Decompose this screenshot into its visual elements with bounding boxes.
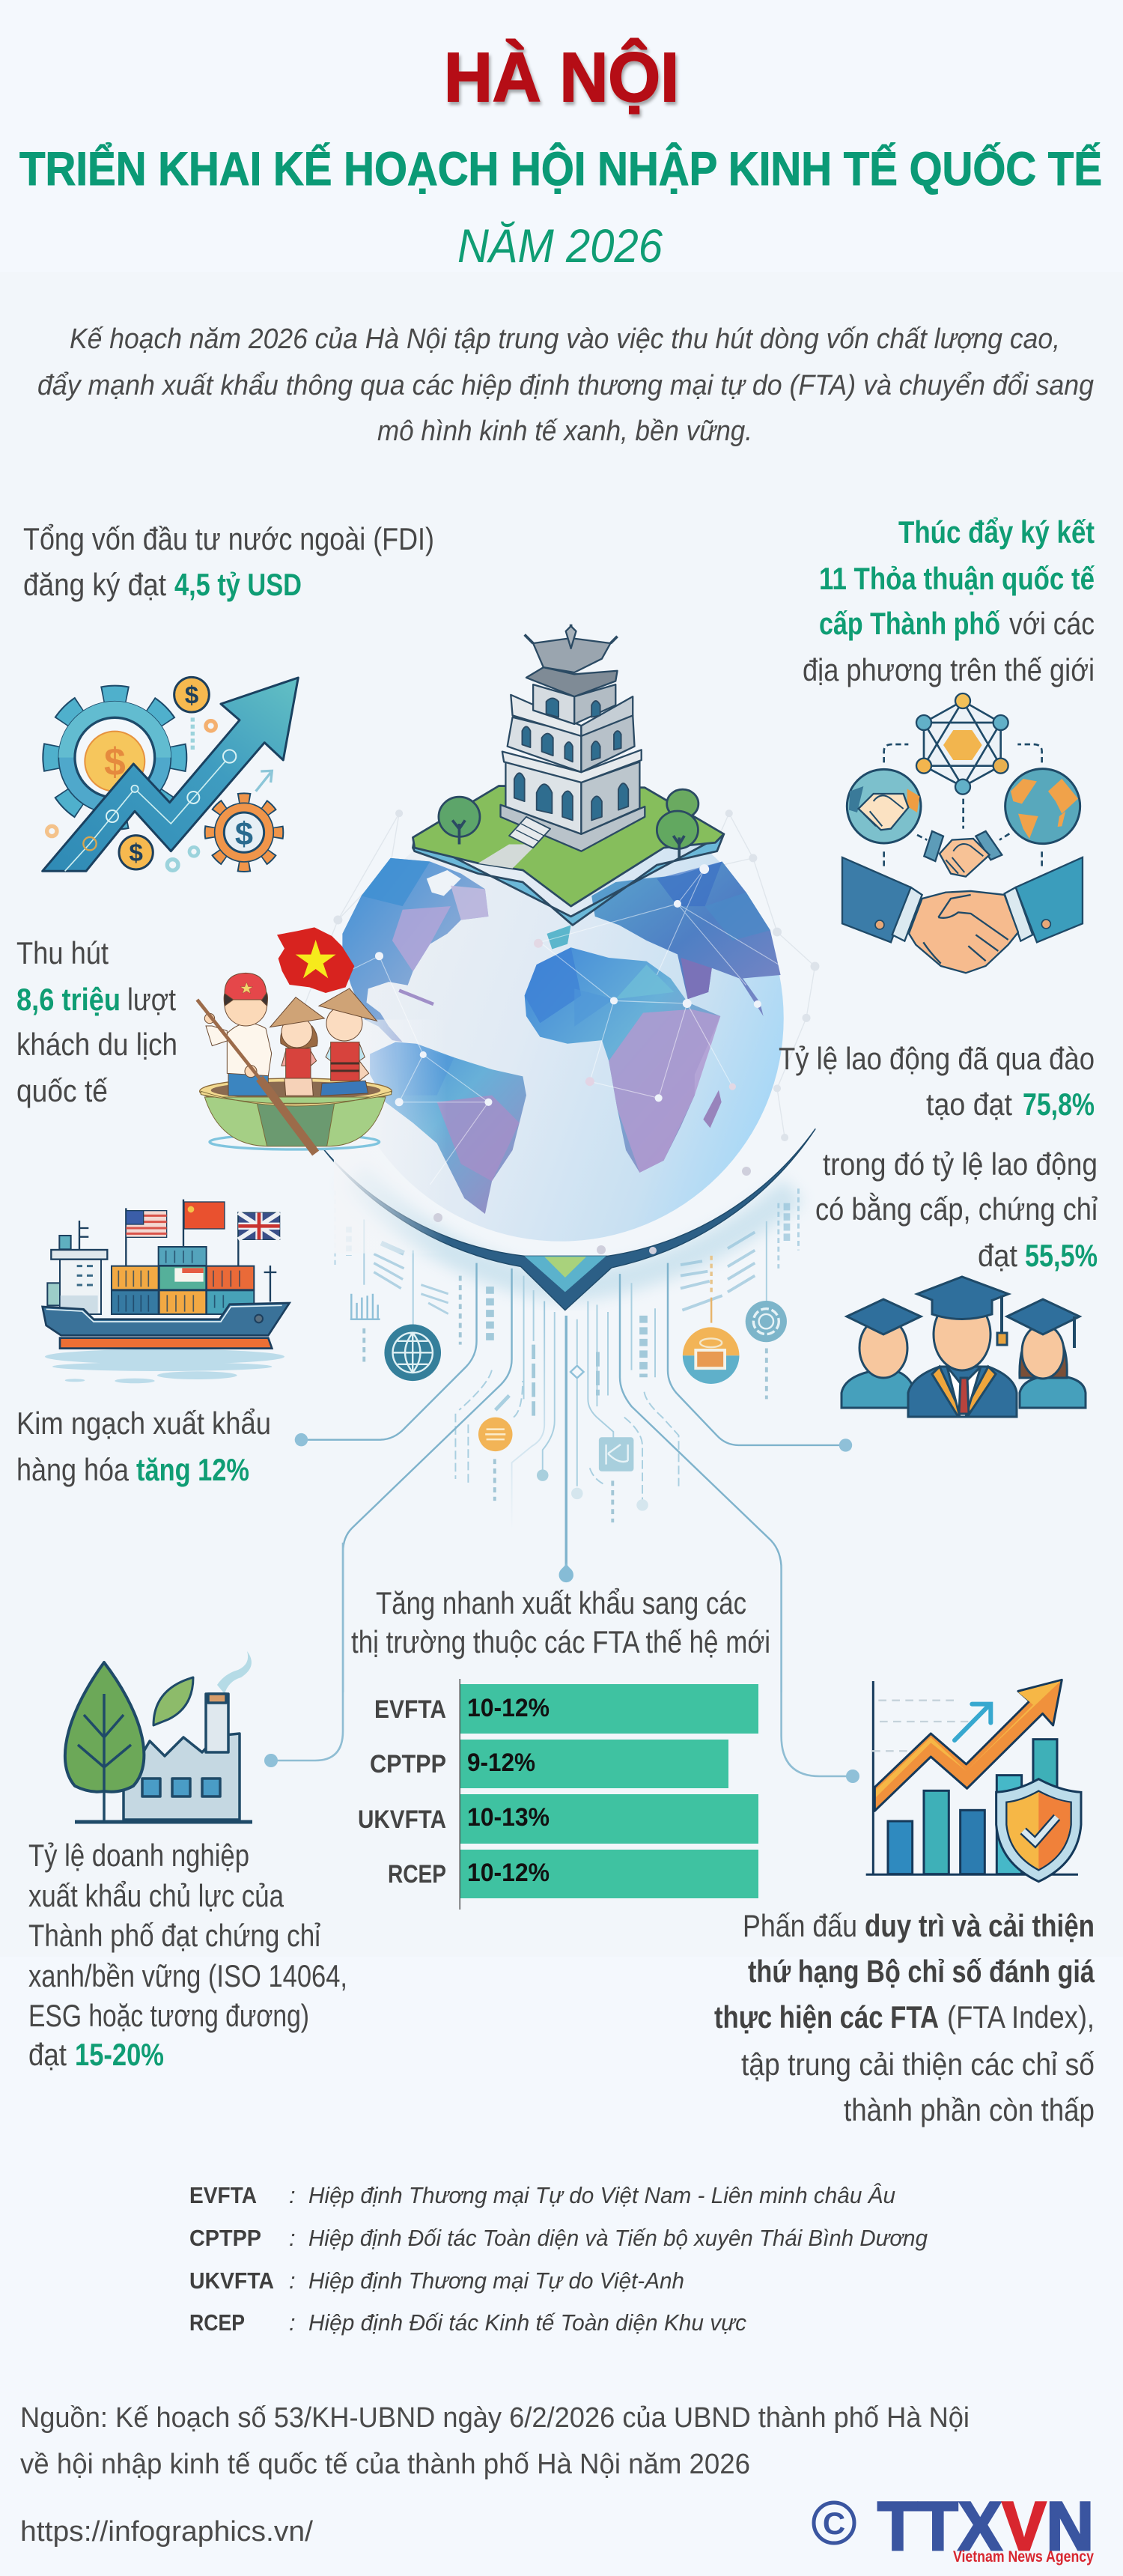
text: export turnover: tăng 12% <box>136 1452 249 1487</box>
blue arrow <box>955 1704 990 1740</box>
main traces <box>301 1263 845 1692</box>
large gear <box>53 696 177 819</box>
shield <box>996 1779 1081 1882</box>
legend: abbreviations <box>189 2182 928 2336</box>
small handshake <box>924 831 1002 877</box>
lower globe mesh nodes <box>433 1167 751 1254</box>
ground <box>75 1820 252 1824</box>
legend: abbreviations: Hiệp định Thương mại Tự do Việt-Anh <box>308 2267 684 2294</box>
tower <box>501 625 645 851</box>
large handshake <box>842 857 1083 973</box>
text: tourists: 8,6 triệu <box>16 982 121 1017</box>
illustration: graduates <box>842 1277 1086 1417</box>
agency name: Vietnam News Agency <box>953 2548 1094 2566</box>
text: tourists: Thu hút <box>16 935 109 970</box>
bars <box>888 1740 1057 1874</box>
bar: UKVFTA: 10-13% <box>467 1803 550 1832</box>
coracle hull <box>201 1091 392 1146</box>
text: bar chart heading: thị trường thuộc các FTA thế hệ mới <box>351 1624 770 1659</box>
bridge <box>47 1236 107 1314</box>
South America <box>370 1042 526 1214</box>
icon: gears and rising arrow <box>43 677 298 871</box>
text: FDI: 4,5 tỷ USD <box>174 567 302 602</box>
Vietnam flag <box>277 927 354 993</box>
text: green certification: ESG hoặc tương đương) <box>28 1998 309 2033</box>
orange gear <box>212 800 276 865</box>
year heading: NĂM 2026 <box>457 220 663 273</box>
text: export turnover: hàng hóa <box>16 1452 130 1487</box>
text: FDI <box>23 521 434 602</box>
text: FTA Index: Phấn đấu <box>743 1908 857 1943</box>
illustration: Turtle Tower on island <box>413 625 724 925</box>
coin bottom: $ <box>129 839 143 867</box>
paddle <box>197 1000 260 1078</box>
legend: abbreviations: EVFTA <box>189 2182 257 2208</box>
bar: UKVFTA: UKVFTA <box>358 1805 446 1834</box>
tower windows <box>514 698 628 820</box>
illustration: container ship <box>43 1200 290 1383</box>
hull <box>43 1303 290 1349</box>
legend: abbreviations: RCEP <box>189 2309 245 2336</box>
UK flag <box>238 1212 280 1239</box>
faint data slats <box>335 1188 798 1313</box>
text: FTA Index: (FTA Index), <box>947 1999 1095 2035</box>
bar: EVFTA: 10-12% <box>467 1694 550 1722</box>
minor traces <box>364 1219 767 1530</box>
bar: RCEP: 10-12% <box>467 1859 550 1887</box>
text: green certification: xuất khẩu chủ lực của <box>28 1878 284 1913</box>
text: export turnover <box>16 1406 271 1487</box>
website link: https://infographics.vn/ <box>20 2516 313 2548</box>
Caribbean <box>399 991 433 1004</box>
text: FDI: Tổng vốn đầu tư nước ngoài (FDI) <box>23 521 434 556</box>
connector drop: centre <box>559 1561 573 1582</box>
smoke <box>217 1651 252 1694</box>
factory <box>124 1694 240 1820</box>
text: green certification: đạt <box>28 2037 67 2072</box>
copyright mark <box>814 2503 854 2543</box>
bar: CPTPP: 9-12% <box>467 1749 535 1777</box>
text: green certification: xanh/bền vững (ISO 14064, <box>28 1958 347 1993</box>
text: international agreements <box>803 514 1095 687</box>
legend: abbreviations: Hiệp định Đối tác Kinh tế Toàn diện Khu vực <box>308 2309 746 2336</box>
icon: square chip <box>599 1437 633 1471</box>
connector dot: factory <box>264 1754 278 1767</box>
text: tourists: lượt <box>127 982 176 1017</box>
text: FTA Index: thực hiện các FTA <box>714 1999 939 2035</box>
text: green certification: Thành phố đạt chứng chỉ <box>28 1918 321 1953</box>
Eurasia <box>591 861 781 1016</box>
legend: abbreviations: UKVFTA <box>189 2267 274 2294</box>
text: tourists: quốc tế <box>16 1073 108 1108</box>
text: international agreements: cấp Thành phố <box>819 606 1000 641</box>
orange gear: $ <box>235 816 253 852</box>
US flag <box>126 1211 167 1237</box>
bar: UKVFTA <box>358 1794 758 1844</box>
text: export turnover: Kim ngạch xuất khẩu <box>16 1406 271 1441</box>
title: Hà Nội: HÀ NỘI <box>444 38 679 116</box>
collar shadow <box>352 1176 794 1288</box>
illustration: tree and factory <box>65 1651 252 1822</box>
trees right <box>657 789 699 858</box>
illustration: coracle boat with tourists <box>197 927 392 1153</box>
connector dot: right <box>839 1439 852 1452</box>
logo: TTXVN <box>814 2488 1094 2566</box>
bar: CPTPP <box>370 1740 728 1788</box>
island <box>413 786 724 925</box>
orange arrow <box>874 1680 1062 1811</box>
legend: abbreviations: : <box>289 2225 296 2251</box>
network mesh <box>334 869 779 1185</box>
left graduate <box>842 1299 921 1408</box>
icon: orange coin <box>478 1418 513 1451</box>
small leaf <box>153 1677 193 1725</box>
central background band <box>0 272 1123 1957</box>
text: international agreements: với các <box>1009 606 1095 641</box>
bar: RCEP: RCEP <box>388 1860 446 1889</box>
tree left <box>439 797 480 845</box>
text: green certification: 15-20% <box>75 2037 164 2072</box>
icon: network and handshake <box>842 693 1083 973</box>
network hexagon <box>916 693 1008 795</box>
text: green certification: Tỷ lệ doanh nghiệp <box>28 1838 249 1873</box>
source text <box>20 2402 970 2480</box>
legend: abbreviations: Hiệp định Đối tác Toàn diện và Tiến bộ xuyên Thái Bình Dương <box>308 2225 928 2251</box>
wordmark: TTXVN <box>877 2488 1094 2565</box>
zigzag arrow <box>43 678 298 871</box>
circuit board lines and icons <box>295 1188 852 1692</box>
globe with collar <box>323 795 815 1310</box>
text: FDI: đăng ký đạt <box>23 567 166 602</box>
Madagascar <box>703 1090 722 1128</box>
intro paragraph: Kế hoạch năm 2026 của Hà Nội tập trung vào việc thu hút dòng vốn chất lượng cao, <box>70 323 1060 355</box>
water <box>210 1134 380 1149</box>
connector dot: index chart <box>846 1770 859 1783</box>
China flag <box>184 1202 225 1229</box>
text: FTA Index <box>714 1908 1095 2127</box>
bar: EVFTA: EVFTA <box>374 1695 446 1724</box>
text: FTA Index: thành phần còn thấp <box>844 2092 1095 2127</box>
intro paragraph: mô hình kinh tế xanh, bền vững. <box>377 416 752 447</box>
icon: circuit chat badge <box>683 1327 739 1384</box>
coin bottom <box>119 836 153 869</box>
small bar chart <box>350 1294 380 1319</box>
legend: abbreviations: CPTPP <box>189 2225 261 2251</box>
Africa <box>525 947 720 1173</box>
North America <box>342 858 488 1042</box>
source text: về hội nhập kinh tế quốc tế của thành phố Hà Nội năm 2026 <box>20 2449 750 2480</box>
text: trained labour <box>779 1041 1098 1273</box>
text: tourists: khách du lịch <box>16 1027 177 1062</box>
left haze over globe <box>334 1020 447 1254</box>
text: trained labour: tạo đạt <box>926 1087 1012 1122</box>
right graduate <box>1007 1299 1086 1408</box>
text: trained labour: 55,5% <box>1025 1238 1098 1273</box>
bar chart <box>358 1679 758 1910</box>
boy <box>319 988 377 1096</box>
continents <box>342 858 781 1214</box>
bar: RCEP <box>388 1850 758 1898</box>
text: trained labour: đạt <box>978 1238 1017 1273</box>
circle: handshake <box>847 769 921 843</box>
axes <box>866 1681 1078 1874</box>
text: tourists <box>16 935 177 1108</box>
tower stairs <box>509 817 550 848</box>
large gear: $ <box>104 740 126 783</box>
girl <box>270 997 324 1096</box>
man <box>204 973 272 1096</box>
coin top: $ <box>185 681 199 709</box>
containers <box>112 1247 254 1314</box>
collar <box>323 1128 815 1310</box>
text: bar chart heading: Tăng nhanh xuất khẩu sang các <box>376 1585 746 1620</box>
legend: abbreviations: Hiệp định Thương mại Tự do Việt Nam - Liên minh châu Âu <box>308 2182 895 2208</box>
text: green certification <box>28 1838 347 2072</box>
globe sphere <box>338 795 784 1242</box>
illustration: chart with shield <box>866 1680 1081 1882</box>
Europe islands <box>547 925 571 950</box>
legend: abbreviations: : <box>289 2309 296 2336</box>
legend: abbreviations: : <box>289 2182 296 2208</box>
outer network around globe <box>296 809 819 1141</box>
long right connector <box>782 1565 853 1776</box>
text: trained labour: 75,8% <box>1023 1087 1095 1122</box>
water reflection <box>45 1349 284 1383</box>
icon: circuit globe <box>384 1325 441 1381</box>
source text: Nguồn: Kế hoạch số 53/KH-UBND ngày 6/2/2026 của UBND thành phố Hà Nội <box>20 2402 970 2434</box>
coin top <box>174 677 209 712</box>
text: bar chart heading <box>351 1585 770 1659</box>
bar: EVFTA <box>374 1684 758 1734</box>
icon: circuit gear <box>746 1301 787 1342</box>
circle: globe <box>1005 769 1080 844</box>
legend: abbreviations: : <box>289 2267 296 2294</box>
coracle back rim <box>200 1078 392 1105</box>
intro paragraph <box>37 323 1094 447</box>
copyright mark: C <box>823 2506 845 2541</box>
bar: CPTPP: CPTPP <box>370 1750 446 1778</box>
large leaf <box>65 1662 144 1821</box>
long left connector <box>271 1543 343 1761</box>
flag poles <box>79 1200 276 1301</box>
centre graduate <box>908 1277 1017 1417</box>
connector dot: left <box>295 1433 308 1446</box>
